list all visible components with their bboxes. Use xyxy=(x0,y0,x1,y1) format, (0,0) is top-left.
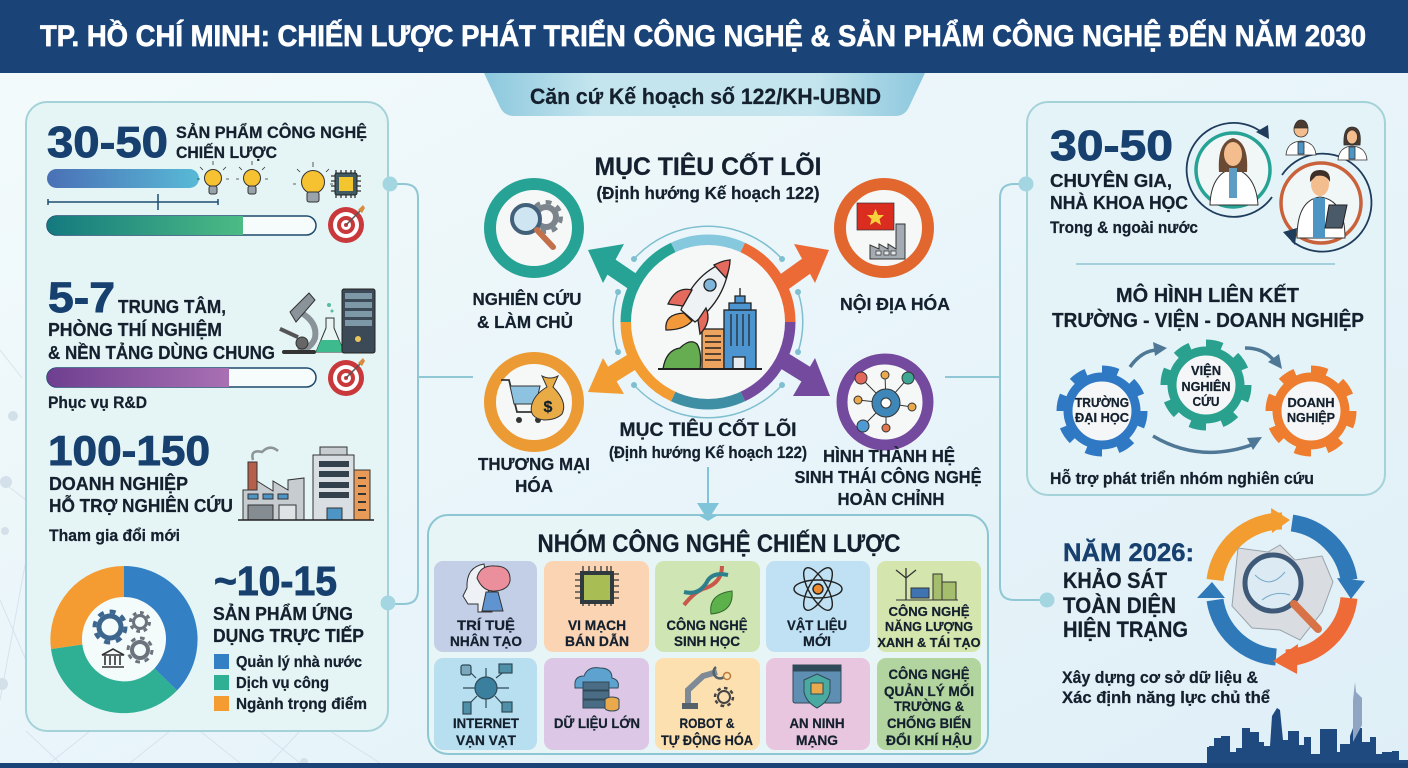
stat: 10-15 direct products xyxy=(213,558,364,646)
icon: female expert xyxy=(1187,123,1272,217)
stat: 30-50 experts: Trong & ngoài nước xyxy=(1050,218,1198,237)
connector lines xyxy=(395,184,1042,604)
stat: 30-50 experts xyxy=(1050,122,1198,237)
icon: flag and factory xyxy=(857,203,905,259)
heading: core goals bottom: MỤC TIÊU CỐT LÕI xyxy=(620,417,796,441)
heading: linkage model: MÔ HÌNH LIÊN KẾT xyxy=(1116,283,1299,307)
donut chart xyxy=(50,566,198,713)
legend: Quản lý nhà nước xyxy=(236,654,362,671)
section: 2026 survey: KHẢO SÁT xyxy=(1063,568,1168,593)
tile: environment and climate: CÔNG NGHỆ xyxy=(888,665,970,682)
stat: 10-15 direct products: ~10-15 xyxy=(214,558,337,604)
goal: commercialization: HÓA xyxy=(515,475,553,496)
arrow: down to technology groups xyxy=(697,467,719,520)
stat: 30-50 strategic products: SẢN PHẨM CÔNG NGHỆ xyxy=(176,123,367,142)
heading: linkage model xyxy=(1052,283,1364,332)
heading: core goals bottom: (Định hướng Kế hoạch 122) xyxy=(609,444,807,462)
tile: AI: TRÍ TUỆ xyxy=(457,616,515,633)
stat: 5-7 labs: PHÒNG THÍ NGHIỆM xyxy=(48,319,222,340)
icon: microscope xyxy=(279,293,316,354)
stat: 10-15 direct products: SẢN PHẨM ỨNG xyxy=(213,603,353,624)
icon: office building xyxy=(313,447,370,520)
tile: robotics: TỰ ĐỘNG HÓA xyxy=(661,731,753,748)
tile: environment and climate: QUẢN LÝ MỐI xyxy=(884,682,974,699)
heading: core goals top: MỤC TIÊU CỐT LÕI xyxy=(594,151,822,181)
stat: 100-150 enterprises: HỖ TRỢ NGHIÊN CỨU xyxy=(49,495,233,516)
arrows from hub xyxy=(588,244,830,396)
legend xyxy=(214,654,367,713)
icon: light bulb xyxy=(197,161,229,194)
gear: research institute: CỨU xyxy=(1192,394,1220,409)
tile: environment and climate: ĐỔI KHÍ HẬU xyxy=(886,731,972,748)
stat: 30-50 experts: NHÀ KHOA HỌC xyxy=(1050,192,1188,213)
skyline xyxy=(1207,708,1408,764)
tile: big data xyxy=(544,658,649,750)
icon: target xyxy=(328,358,365,396)
section: 2026 survey: NĂM 2026: xyxy=(1063,538,1194,567)
icon: light bulb large xyxy=(293,162,333,202)
tile: cyber security: AN NINH xyxy=(790,715,844,731)
stat: 5-7 labs xyxy=(47,274,316,412)
section: 2026 survey: Xây dựng cơ sở dữ liệu & xyxy=(1062,668,1258,687)
goal: research and mastery: & LÀM CHỦ xyxy=(477,311,573,332)
tile: green energy: CÔNG NGHỆ xyxy=(888,604,970,619)
goal: research and mastery xyxy=(472,178,584,332)
gear: research institute: NGHIÊN xyxy=(1182,379,1230,394)
goal: technology ecosystem: HOÀN CHỈNH xyxy=(838,488,944,509)
icon: gears and institution xyxy=(94,612,152,667)
icon: flask xyxy=(316,303,344,352)
icon: microchip xyxy=(331,170,361,198)
panel: right experts and linkage xyxy=(1027,102,1385,495)
gear: enterprise: NGHIỆP xyxy=(1287,410,1335,425)
tile: semiconductors: BÁN DẪN xyxy=(565,633,629,649)
tile: environment and climate xyxy=(877,658,981,750)
connector node xyxy=(1018,176,1034,192)
section: 2026 survey xyxy=(1062,508,1365,707)
stat: 30-50 experts: 30-50 xyxy=(1050,122,1173,170)
stat: 5-7 labs: Phục vụ R&D xyxy=(48,393,147,412)
heading: core goals top xyxy=(594,151,822,203)
icon: magnifier and gear xyxy=(512,202,561,247)
tile: robotics xyxy=(655,658,760,750)
goal: research and mastery: NGHIÊN CỨU xyxy=(472,288,582,309)
arrows between gears xyxy=(1130,342,1282,452)
icon: cart and money bag: $ xyxy=(544,399,553,416)
gear: enterprise xyxy=(1270,370,1352,452)
panel: strategic technology groups xyxy=(428,515,988,754)
tile: robotics: ROBOT & xyxy=(680,715,734,731)
stat: 30-50 strategic products: 30-50 xyxy=(47,118,168,167)
tile: big data: DỮ LIỆU LỚN xyxy=(554,714,640,731)
icon: small doctor xyxy=(1338,127,1367,160)
goal: localization xyxy=(834,178,950,314)
icon: rocket and city xyxy=(658,260,762,369)
tile: environment and climate: TRƯỜNG & xyxy=(894,697,964,714)
stat: 30-50 strategic products xyxy=(47,118,367,235)
header banner xyxy=(0,0,1408,73)
gear: university: TRƯỜNG xyxy=(1075,395,1129,410)
tile: new materials: MỚI xyxy=(803,632,831,649)
gear: research institute xyxy=(1164,344,1248,426)
icon: server xyxy=(342,289,375,353)
icon: cycle with map and magnifier xyxy=(1197,508,1365,674)
stat: 5-7 labs: 5-7 xyxy=(48,274,115,322)
bottom bar xyxy=(0,763,1408,768)
tile: environment and climate: CHỐNG BIẾN xyxy=(887,714,971,731)
panel: left key figures xyxy=(26,102,388,731)
icon: small doctor xyxy=(1286,120,1316,155)
goal: technology ecosystem: HÌNH THÀNH HỆ xyxy=(823,445,955,466)
stat: 100-150 enterprises xyxy=(48,427,233,545)
goal: technology ecosystem xyxy=(794,353,982,509)
heading: core goals top: (Định hướng Kế hoạch 122) xyxy=(596,183,820,203)
gear: university xyxy=(1060,370,1144,452)
tile: AI xyxy=(434,561,537,652)
tile: biotechnology xyxy=(655,561,760,652)
tile: cyber security: MẠNG xyxy=(796,732,838,748)
tile: semiconductors xyxy=(544,561,649,652)
tile: IoT: INTERNET xyxy=(453,715,519,731)
connector node xyxy=(382,176,398,192)
icon: male expert xyxy=(1281,154,1371,252)
legend: Ngành trọng điểm xyxy=(236,695,367,713)
tile: new materials: VẬT LIỆU xyxy=(787,616,847,633)
heading: core goals bottom xyxy=(609,417,807,462)
goal: commercialization: THƯƠNG MẠI xyxy=(478,454,590,474)
stat: 5-7 labs: & NỀN TẢNG DÙNG CHUNG xyxy=(48,342,275,363)
tile: biotechnology: CÔNG NGHỆ xyxy=(666,616,748,633)
tile: green energy xyxy=(877,561,981,652)
subtitle ribbon xyxy=(484,73,925,116)
icon: light bulb xyxy=(236,161,268,194)
heading: NHÓM CÔNG NGHỆ CHIẾN LƯỢC xyxy=(538,528,900,558)
section: 2026 survey: Xác định năng lực chủ thể xyxy=(1062,688,1271,707)
icon: target xyxy=(328,205,365,243)
icon: cart and money bag xyxy=(501,376,564,423)
tile: cyber security xyxy=(766,658,870,750)
goal: localization: NỘI ĐỊA HÓA xyxy=(840,293,950,314)
stat: 5-7 labs: TRUNG TÂM, xyxy=(118,296,226,317)
legend: Dịch vụ công xyxy=(236,675,329,692)
tile: semiconductors: VI MẠCH xyxy=(568,617,626,633)
heading: linkage model: TRƯỜNG - VIỆN - DOANH NGHIỆP xyxy=(1052,308,1364,332)
gear: university: ĐẠI HỌC xyxy=(1075,411,1129,425)
stat: 10-15 direct products: DỤNG TRỰC TIẾP xyxy=(213,625,364,646)
divider xyxy=(1076,263,1335,265)
landmark tower xyxy=(1353,682,1362,742)
stat: 100-150 enterprises: 100-150 xyxy=(48,427,210,474)
section: 2026 survey: TOÀN DIỆN xyxy=(1063,593,1176,618)
gear: research institute: VIỆN xyxy=(1191,363,1221,378)
stat: 30-50 strategic products: CHIẾN LƯỢC xyxy=(176,143,277,162)
icon: network xyxy=(854,371,916,432)
tile: green energy: NĂNG LƯỢNG xyxy=(885,619,973,634)
tile: new materials xyxy=(766,561,870,652)
caption: Hỗ trợ phát triển nhóm nghiên cứu xyxy=(1050,469,1314,488)
goal: technology ecosystem: SINH THÁI CÔNG NGHỆ xyxy=(794,466,982,487)
section: 2026 survey: HIỆN TRẠNG xyxy=(1063,617,1188,642)
stat: 100-150 enterprises: Tham gia đổi mới xyxy=(49,526,180,545)
stat: 100-150 enterprises: DOANH NGHIỆP xyxy=(49,473,188,494)
connector node xyxy=(1040,592,1054,608)
tile: green energy: XANH & TÁI TẠO xyxy=(878,635,980,650)
central hub xyxy=(613,226,803,418)
gear: enterprise: DOANH xyxy=(1288,396,1334,410)
tile: IoT: VẠN VẠT xyxy=(456,732,516,748)
icon: factory xyxy=(243,448,304,520)
goal: commercialization xyxy=(478,352,590,496)
tile: IoT xyxy=(434,658,537,750)
subtitle ribbon: Căn cứ Kế hoạch số 122/KH-UBND xyxy=(530,84,881,109)
tile: AI: NHÂN TẠO xyxy=(450,632,522,649)
connector node xyxy=(380,596,396,610)
stat: 30-50 experts: CHUYÊN GIA, xyxy=(1050,170,1172,191)
tile: biotechnology: SINH HỌC xyxy=(674,633,740,649)
